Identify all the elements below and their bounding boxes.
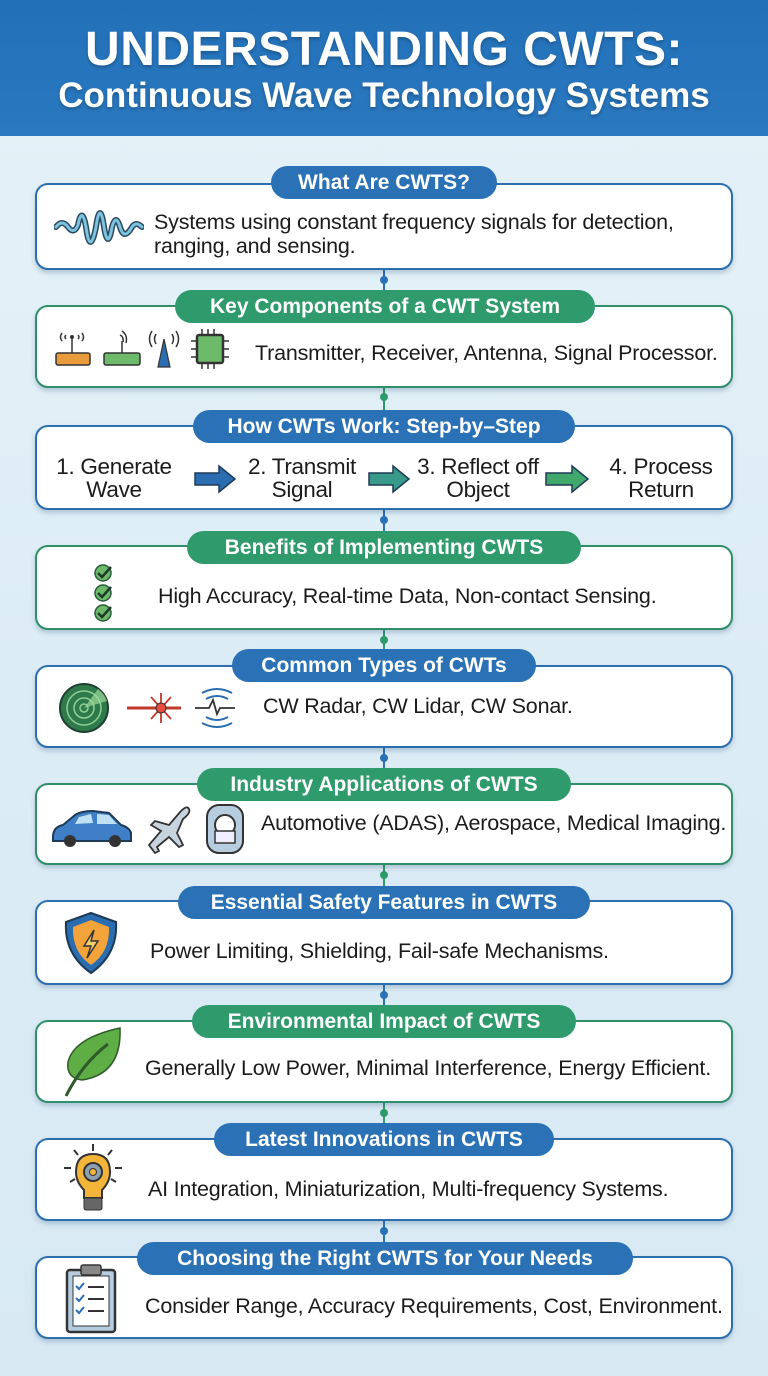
icons: car, plane, MRI bbox=[52, 804, 244, 854]
heading: how it works: How CWTs Work: Step-by–Step bbox=[227, 415, 541, 438]
step 3 bbox=[417, 454, 540, 502]
text: AI Integration, Miniaturization, Multi-frequency Systems. bbox=[148, 1177, 668, 1201]
icons: components bbox=[55, 329, 229, 369]
heading: what are CWTS: What Are CWTS? bbox=[298, 171, 470, 194]
text: Automotive (ADAS), Aerospace, Medical Imaging. bbox=[261, 811, 726, 835]
header bbox=[0, 0, 768, 136]
heading: innovations bbox=[214, 1123, 554, 1156]
text bbox=[154, 210, 674, 258]
subtitle: Continuous Wave Technology Systems bbox=[58, 76, 710, 115]
icon: shield bbox=[64, 912, 118, 974]
icons: radar, laser, sonar bbox=[59, 683, 235, 733]
panel: choosing bbox=[35, 1256, 733, 1339]
panel: how it works bbox=[35, 425, 733, 510]
heading: benefits: Benefits of Implementing CWTS bbox=[225, 536, 543, 559]
arrow bbox=[368, 464, 410, 494]
icon: checkmarks bbox=[94, 564, 112, 622]
connectors bbox=[383, 270, 385, 306]
panel: environmental bbox=[35, 1020, 733, 1103]
text: Consider Range, Accuracy Requirements, Cost, Environment. bbox=[145, 1294, 723, 1318]
heading: applications bbox=[197, 768, 571, 801]
text: CW Radar, CW Lidar, CW Sonar. bbox=[263, 694, 573, 718]
panel: types bbox=[35, 665, 733, 748]
heading: environmental: Environmental Impact of CWTS bbox=[228, 1010, 540, 1033]
panel: safety bbox=[35, 900, 733, 985]
icon: clipboard bbox=[66, 1264, 116, 1334]
panel: benefits bbox=[35, 545, 733, 630]
text: Systems using constant frequency signals for detection, bbox=[154, 210, 674, 234]
step 1: Wave bbox=[86, 477, 142, 502]
icon: wave bbox=[54, 210, 144, 245]
heading: how it works bbox=[193, 410, 575, 443]
heading: choosing bbox=[137, 1242, 633, 1275]
icon: leaf bbox=[64, 1027, 121, 1097]
panel: what are CWTS bbox=[35, 183, 733, 270]
panel: innovations bbox=[35, 1138, 733, 1221]
heading: environmental bbox=[192, 1005, 576, 1038]
text: High Accuracy, Real-time Data, Non-contact Sensing. bbox=[158, 584, 656, 608]
step 1: 1. Generate bbox=[56, 454, 172, 479]
heading: key components bbox=[175, 290, 595, 323]
heading: types: Common Types of CWTs bbox=[261, 654, 507, 677]
heading: safety: Essential Safety Features in CWTS bbox=[211, 891, 557, 914]
arrow bbox=[194, 464, 236, 494]
step 2 bbox=[248, 454, 356, 502]
text: Generally Low Power, Minimal Interference, Energy Efficient. bbox=[145, 1056, 711, 1080]
heading: applications: Industry Applications of CWTS bbox=[230, 773, 538, 796]
heading: innovations: Latest Innovations in CWTS bbox=[245, 1128, 523, 1151]
arrow bbox=[545, 464, 590, 494]
title: UNDERSTANDING CWTS: bbox=[85, 23, 683, 76]
heading: types bbox=[232, 649, 536, 682]
step 3: 3. Reflect off bbox=[417, 454, 539, 479]
heading: key components: Key Components of a CWT System bbox=[210, 295, 560, 318]
icon: bulb gear bbox=[64, 1144, 122, 1210]
step 4: Return bbox=[628, 477, 694, 502]
heading: choosing: Choosing the Right CWTS for Your Needs bbox=[177, 1247, 593, 1270]
panel: key components bbox=[35, 305, 733, 388]
text: ranging, and sensing. bbox=[154, 234, 355, 258]
step 2: 2. Transmit bbox=[248, 454, 356, 479]
step 2: Signal bbox=[272, 477, 332, 502]
step 3: Object bbox=[446, 477, 510, 502]
step 4 bbox=[609, 454, 713, 502]
step 1 bbox=[56, 454, 172, 502]
text: Transmitter, Receiver, Antenna, Signal Processor. bbox=[255, 341, 718, 365]
step 4: 4. Process bbox=[609, 454, 713, 479]
heading: what are CWTS bbox=[271, 166, 497, 199]
text: Power Limiting, Shielding, Fail-safe Mechanisms. bbox=[150, 939, 609, 963]
panel: applications bbox=[35, 783, 733, 865]
heading: safety bbox=[178, 886, 590, 919]
heading: benefits bbox=[187, 531, 581, 564]
